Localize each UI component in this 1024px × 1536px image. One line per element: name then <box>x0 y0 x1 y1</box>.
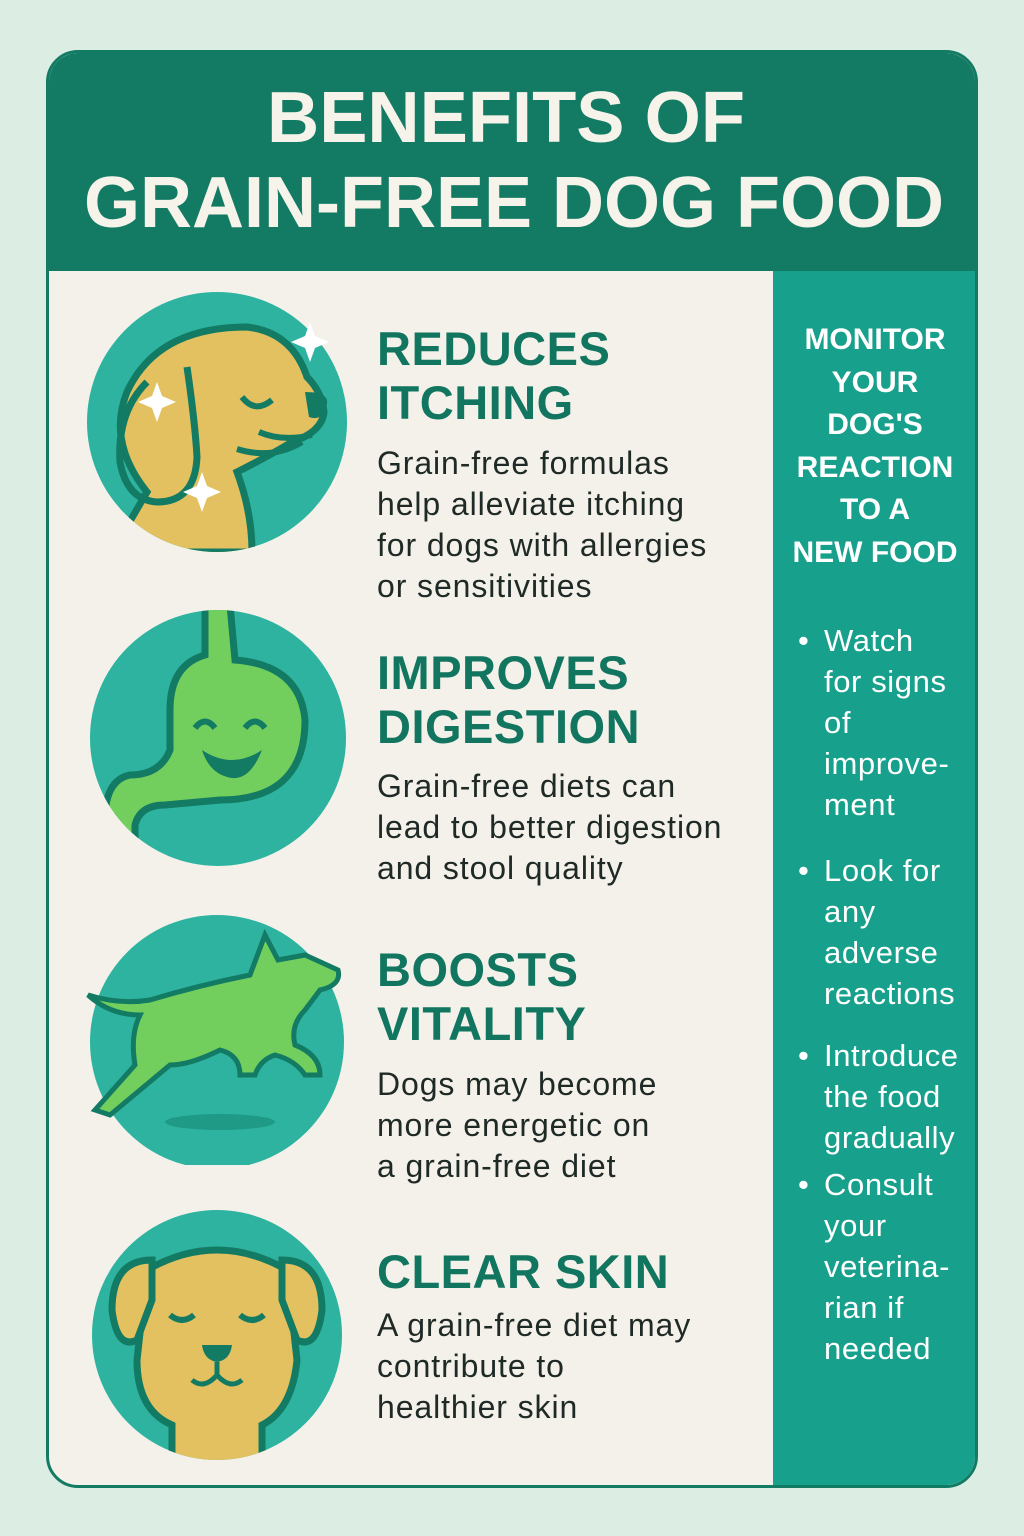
sidebar heading: DOG'S <box>827 408 923 441</box>
header band <box>49 53 981 271</box>
bullet 3: • <box>798 1038 809 1073</box>
bullet 1: ment <box>824 787 895 822</box>
text: boosts vitality: Dogs may become <box>377 1066 657 1102</box>
title <box>84 78 944 243</box>
icon: running dog <box>86 915 344 1165</box>
bullet 3: gradually <box>824 1120 955 1155</box>
sidebar heading: MONITOR <box>804 323 946 356</box>
text: improves digestion: IMPROVES <box>377 646 629 699</box>
text: your <box>824 1208 887 1243</box>
bullet 3 <box>798 1038 959 1155</box>
sidebar heading: TO A <box>840 493 910 526</box>
text: improves digestion: and stool quality <box>377 850 624 886</box>
bullet 1: Watch <box>824 623 914 658</box>
sidebar heading: YOUR <box>832 366 918 398</box>
text: clear skin <box>377 1245 691 1425</box>
text: needed <box>824 1331 931 1366</box>
text: reduces itching <box>377 322 707 604</box>
sidebar heading <box>792 323 958 568</box>
text: clear skin: contribute to <box>377 1348 565 1384</box>
icon: happy stomach <box>90 610 346 866</box>
sidebar heading: REACTION <box>797 450 953 484</box>
bullet 2: reactions <box>824 976 955 1011</box>
bullet 1: • <box>798 623 809 658</box>
text: reduces itching: Grain-free formulas <box>377 445 670 481</box>
icon: dog face <box>92 1210 342 1460</box>
text: rian if <box>824 1290 904 1325</box>
bullet 4: • <box>798 1167 809 1202</box>
text: reduces itching: for dogs with allergies <box>377 527 707 563</box>
title: BENEFITS OF <box>267 78 745 158</box>
text: improves digestion: Grain-free diets can <box>377 768 676 804</box>
bullet 1: for signs <box>824 664 947 699</box>
bullet 2: adverse <box>824 935 938 970</box>
bullet 1 <box>798 623 949 822</box>
bullet 2: Look for <box>824 853 941 888</box>
bullet 1: improve- <box>824 746 949 781</box>
bullet 3: Introduce <box>824 1038 959 1073</box>
text: improves digestion <box>377 646 722 886</box>
text: clear skin: CLEAR SKIN <box>377 1245 669 1298</box>
bullet 4 <box>798 1167 950 1366</box>
bullet 1: of <box>824 705 851 740</box>
text: boosts vitality: a grain-free diet <box>377 1148 616 1184</box>
text: boosts vitality: BOOSTS <box>377 943 578 996</box>
text: boosts vitality <box>377 943 657 1184</box>
title: GRAIN-FREE DOG FOOD <box>84 163 944 243</box>
text: reduces itching: ITCHING <box>377 376 574 429</box>
bullet 2: • <box>798 853 809 888</box>
sidebar heading: NEW FOOD <box>792 536 958 568</box>
text: boosts vitality: more energetic on <box>377 1107 650 1143</box>
bullet 4: Consult <box>824 1167 933 1202</box>
text: boosts vitality: VITALITY <box>377 997 586 1050</box>
text: clear skin: A grain-free diet may <box>377 1307 691 1343</box>
bullet 2 <box>798 853 955 1011</box>
text: improves digestion: DIGESTION <box>377 700 640 753</box>
text: reduces itching: REDUCES <box>377 322 610 375</box>
sidebar bullets <box>798 623 959 1366</box>
text: improves digestion: lead to better digestion <box>377 809 722 845</box>
bullet 2: any <box>824 894 876 929</box>
icon: happy dog profile <box>87 292 347 552</box>
text: reduces itching: or sensitivities <box>377 568 592 604</box>
sidebar <box>773 271 981 1491</box>
text: clear skin: healthier skin <box>377 1389 578 1425</box>
text: reduces itching: help alleviate itching <box>377 486 685 522</box>
bullet 3: the food <box>824 1079 941 1114</box>
text: veterina- <box>824 1249 950 1284</box>
